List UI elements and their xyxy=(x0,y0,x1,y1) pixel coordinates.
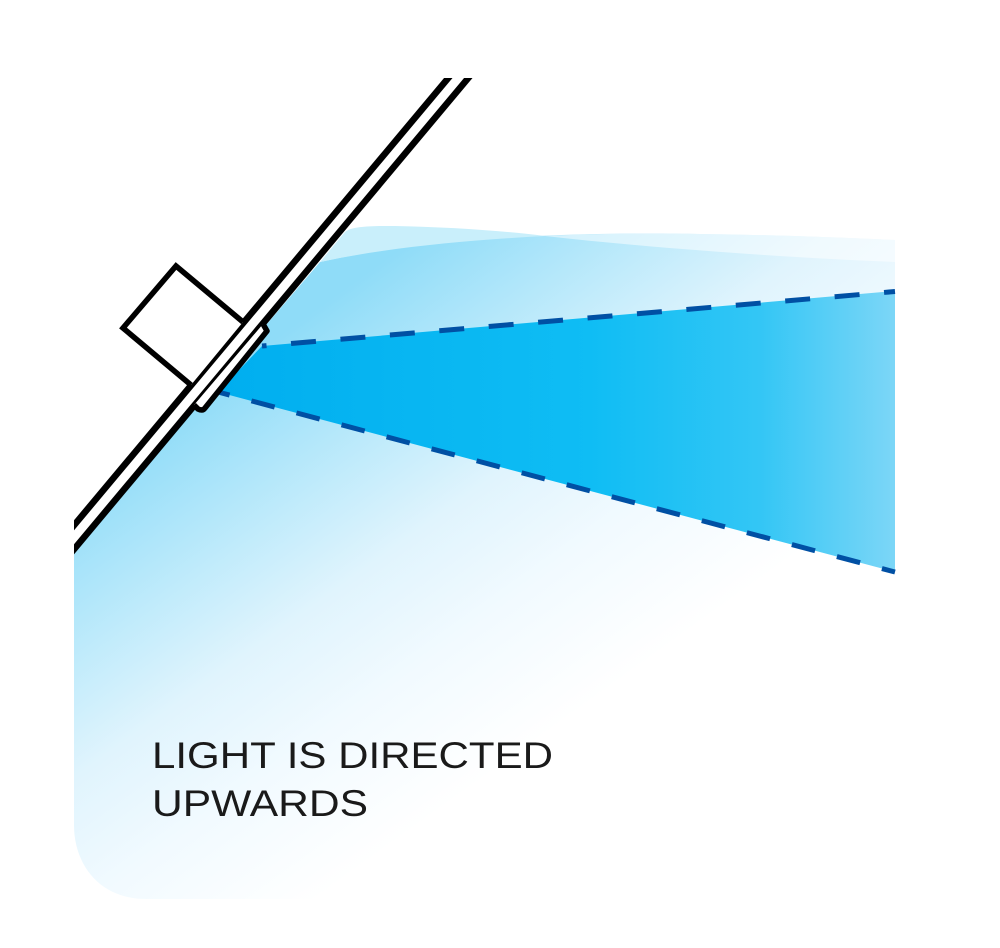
icon: square fixture box behind wall xyxy=(123,266,243,385)
light beam xyxy=(218,291,895,572)
caption: LIGHT IS DIRECTED xyxy=(152,735,553,776)
infographic: light directed upwards xyxy=(74,78,896,899)
caption xyxy=(152,735,553,824)
caption: UPWARDS xyxy=(152,783,368,824)
beam upper dashed edge xyxy=(262,292,895,346)
beam lower dashed edge xyxy=(218,392,895,572)
panel: light glow area xyxy=(74,226,895,899)
icon: slim light fitting on wall xyxy=(194,324,267,410)
wall: double angled line xyxy=(60,64,480,566)
